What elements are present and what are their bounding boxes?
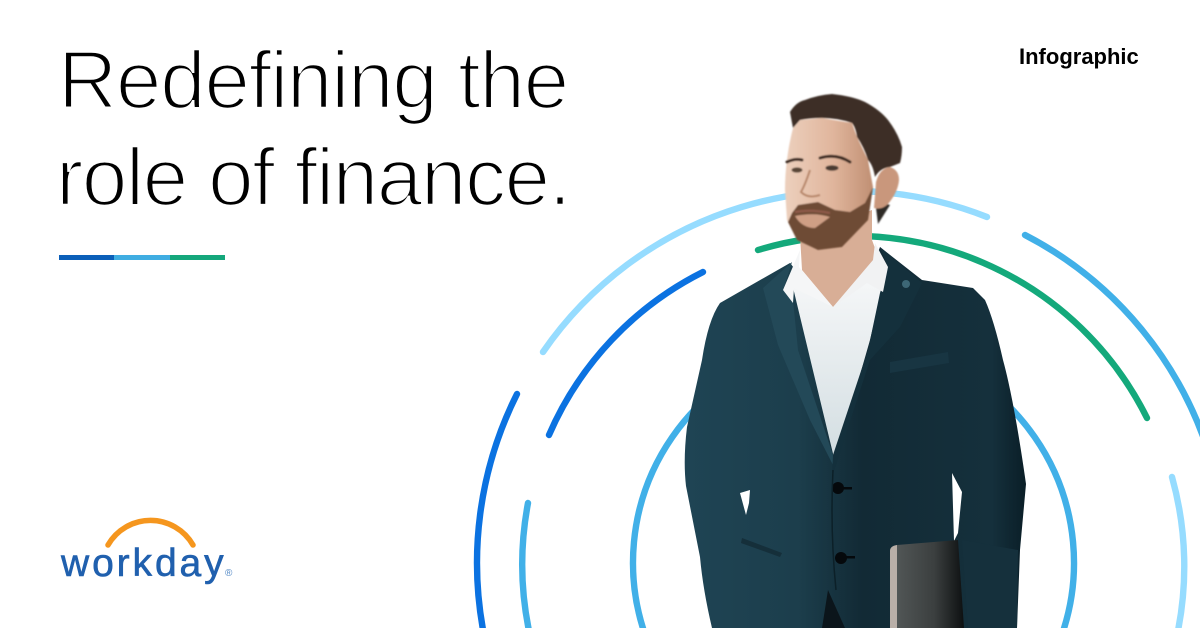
right lapel: [832, 247, 922, 477]
arc: cyan upper right: [1025, 235, 1200, 464]
arc: inner cyan ring: [633, 342, 1074, 628]
arc: sky lower right: [1172, 477, 1184, 628]
lapel button: [902, 280, 910, 288]
arc: cyan lower left: [522, 503, 531, 628]
ear: [874, 167, 899, 208]
head: [785, 94, 902, 250]
title: Redefining the: [58, 35, 568, 126]
nose: [801, 170, 820, 196]
arc: blue lower left: [477, 394, 517, 628]
title: [56, 35, 570, 223]
mouth: [795, 211, 830, 213]
arc: green top: [758, 236, 1147, 418]
jacket: [685, 247, 1026, 628]
neck shadow behind ear: [875, 200, 890, 224]
shirt collar left: [783, 250, 833, 307]
shirt collar right: [833, 243, 888, 307]
label: Infographic: Infographic: [1019, 44, 1139, 69]
arc: light sky top: [543, 191, 987, 352]
title underline: [59, 255, 225, 260]
eyebrows: [787, 156, 850, 162]
trousers: [810, 590, 845, 628]
left lapel: [763, 262, 833, 465]
neck: [800, 210, 880, 307]
workday logo: workday: [60, 542, 227, 585]
face: [785, 118, 873, 250]
jacket buttons: [832, 482, 855, 564]
hair: [790, 94, 902, 177]
skin under lip: [795, 214, 830, 228]
title: role of finance.: [56, 132, 570, 223]
right forearm over laptop: [962, 540, 1018, 628]
hip pocket: [741, 538, 782, 557]
laptop: [890, 540, 964, 628]
shirt: [790, 270, 887, 462]
arc: blue upper left: [549, 272, 703, 435]
breast pocket: [890, 352, 949, 373]
center jacket edge: [832, 470, 836, 590]
workday logo: [60, 518, 233, 585]
workday logo: ®: [225, 568, 233, 579]
beard: [788, 187, 873, 250]
eyes: [792, 167, 802, 173]
laptop silver edge: [890, 545, 897, 628]
